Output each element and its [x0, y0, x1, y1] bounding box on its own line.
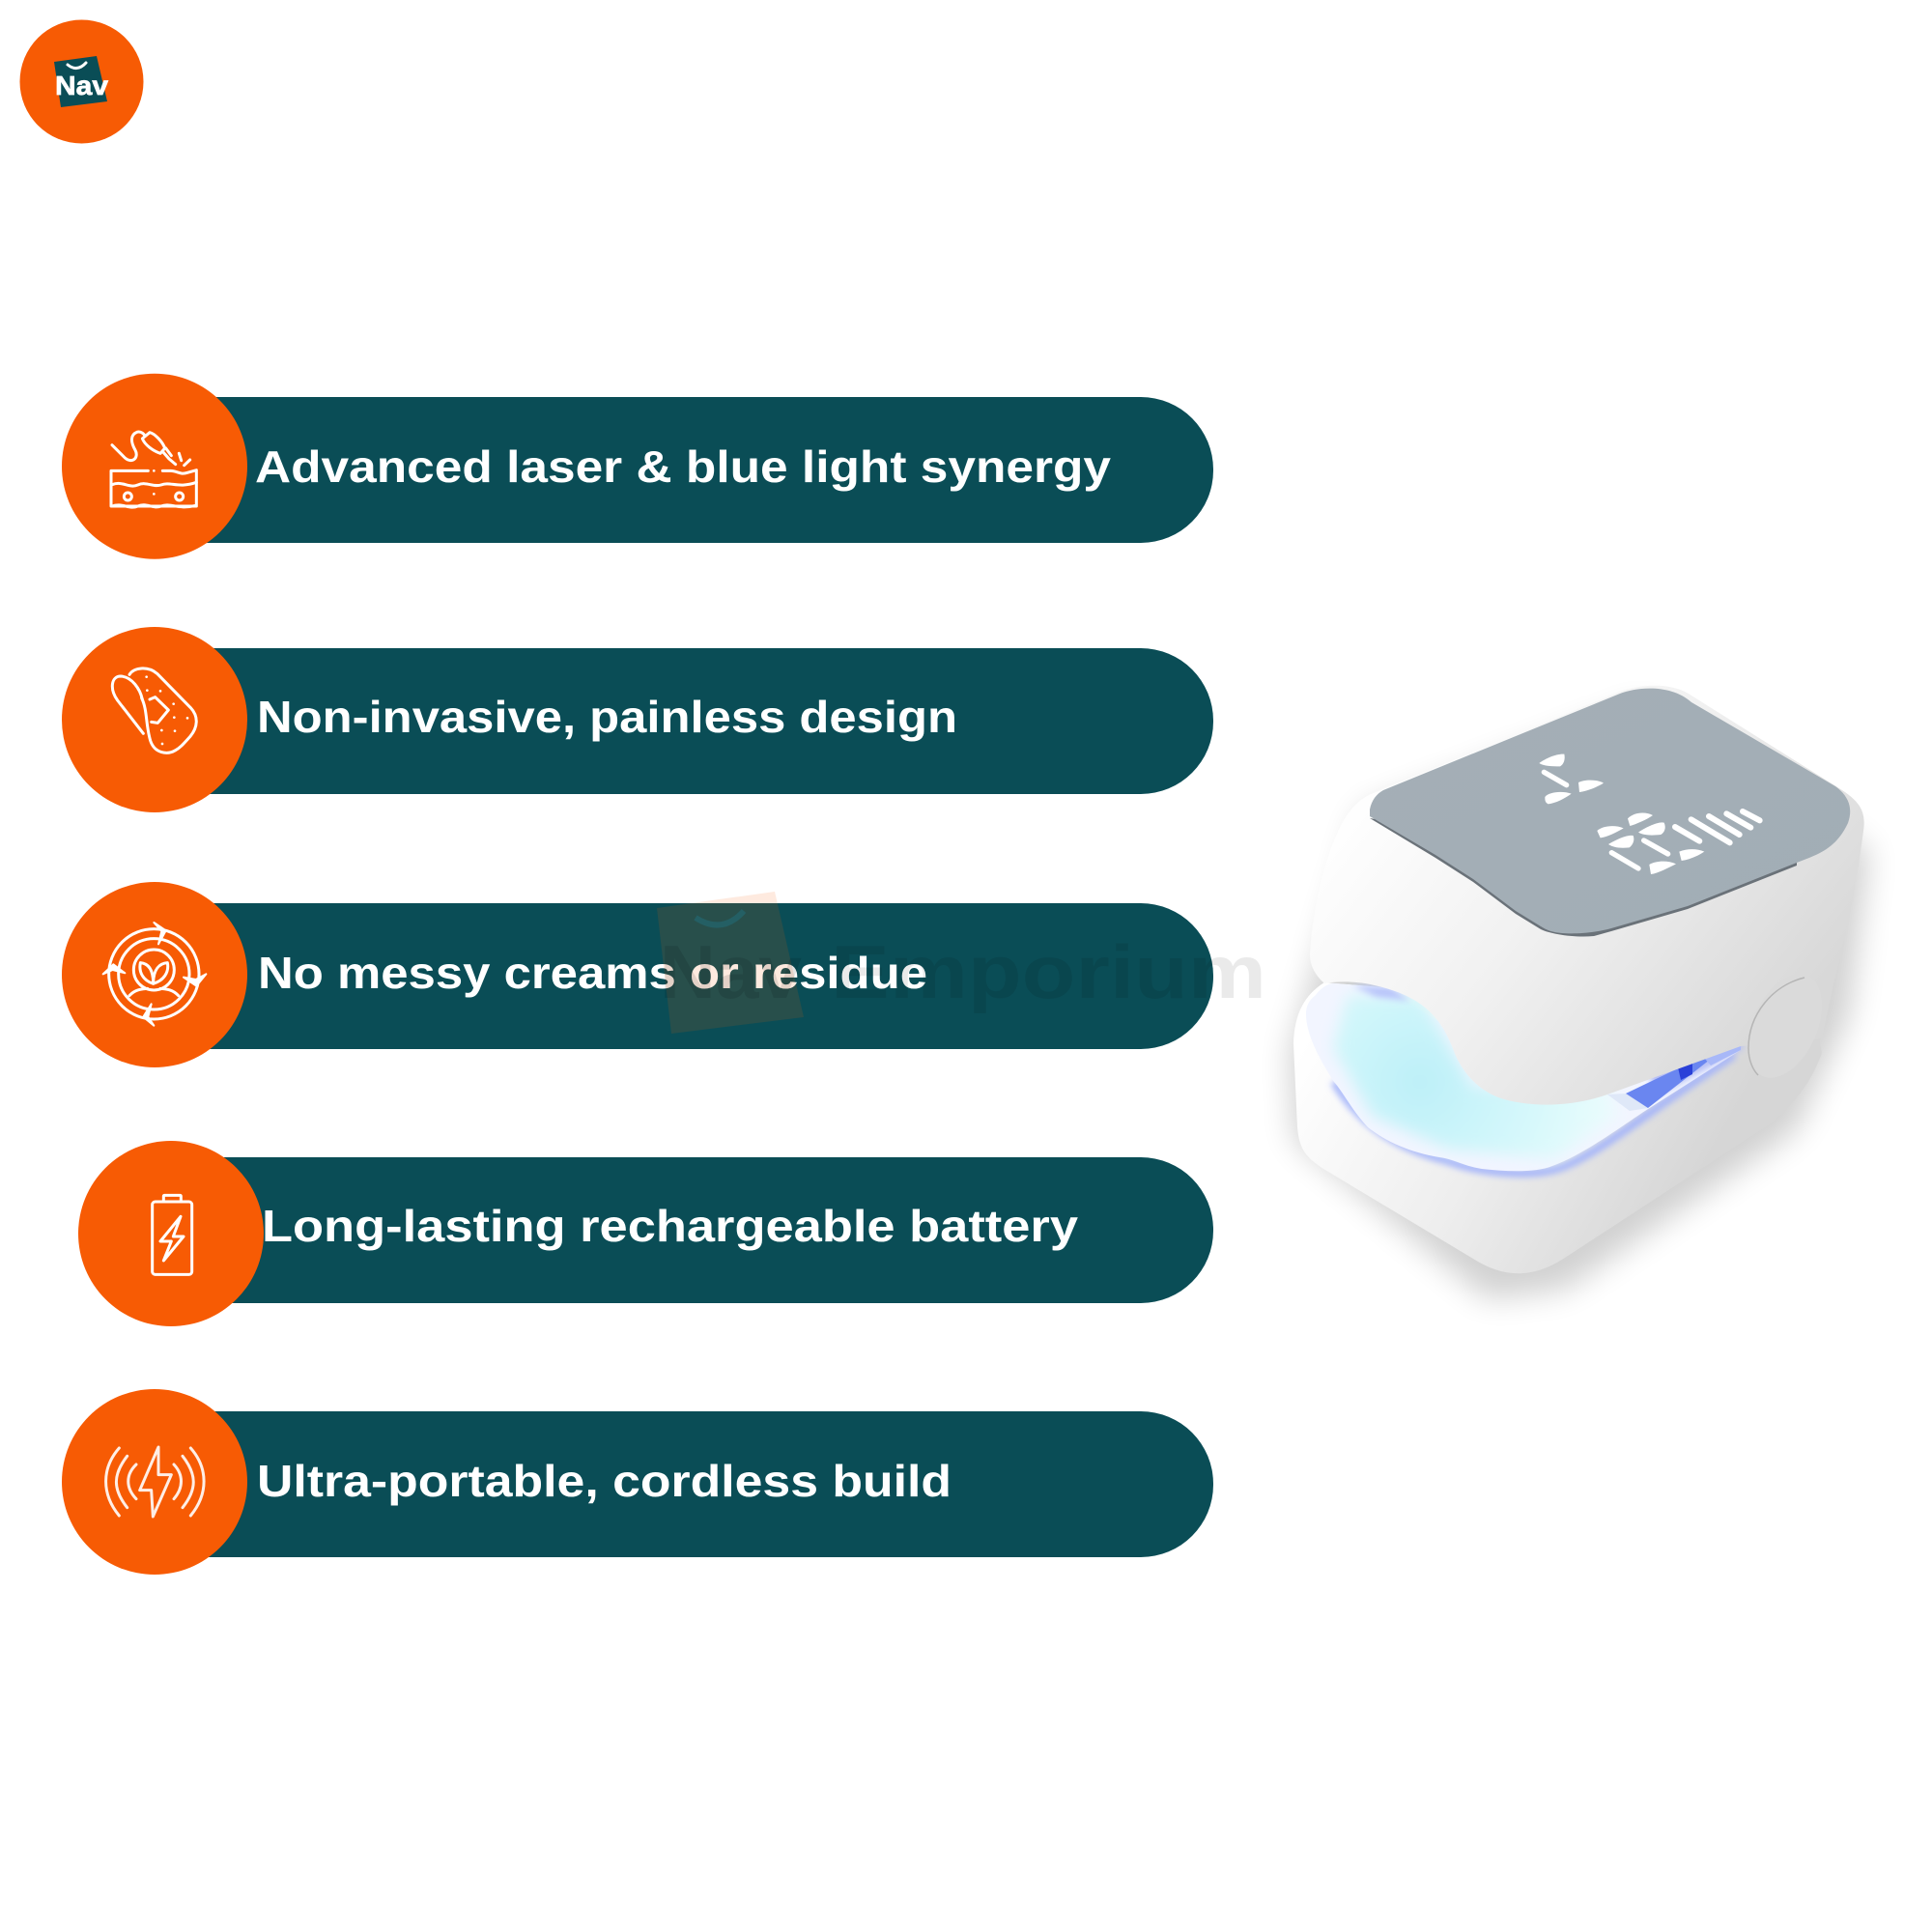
slot tip [1704, 1046, 1741, 1065]
watermark bag [657, 892, 804, 1034]
logo bag [54, 56, 107, 107]
slot blue light [1626, 1056, 1715, 1108]
product image: blue light device [1290, 686, 1869, 1299]
logo wordmark: Nav [55, 71, 108, 100]
lower body [1293, 982, 1822, 1273]
icon circle [62, 374, 247, 559]
label: Long-lasting rechargeable battery [262, 1201, 1078, 1251]
feature row 1 [62, 374, 1213, 559]
watermark wordmark: Nav [660, 929, 803, 1014]
logo badge [19, 19, 143, 143]
icon: wireless bolt [106, 1447, 204, 1517]
feature row 3 [62, 882, 1213, 1067]
pill [97, 903, 1213, 1049]
metal plate edge [1370, 818, 1797, 937]
icon: bandage [112, 668, 196, 753]
icon circle [62, 882, 247, 1067]
label: No messy creams or residue [258, 948, 927, 998]
slot streak [1678, 1061, 1692, 1080]
button edge [1748, 978, 1804, 1075]
pill [97, 648, 1213, 794]
channel blue halo [1334, 1055, 1734, 1173]
icon circle [78, 1141, 264, 1326]
feature row 5 [62, 1389, 1213, 1575]
metal plate [1370, 689, 1850, 933]
feature row 4 [78, 1141, 1213, 1326]
channel top tint [1352, 985, 1410, 1001]
side button [1734, 963, 1836, 1089]
icon: leaf cycle [103, 923, 206, 1026]
display digits [1539, 754, 1760, 874]
watermark emporium: Emporium [831, 929, 1266, 1014]
icon circle [62, 627, 247, 812]
icon: laser on skin [111, 432, 196, 507]
watermark: Nav Emporium [657, 892, 1266, 1034]
pill [97, 1411, 1213, 1557]
upper cap [1310, 686, 1864, 1105]
glowing channel [1306, 983, 1741, 1171]
icon: battery [153, 1195, 192, 1274]
pill [97, 397, 1213, 543]
pill [111, 1157, 1213, 1303]
channel cyan core [1333, 995, 1618, 1159]
slot halo [1647, 1034, 1744, 1096]
logo smile [68, 63, 86, 69]
label: Advanced laser & blue light synergy [255, 441, 1111, 492]
slot light band [1607, 1094, 1648, 1111]
watermark smile [696, 911, 744, 925]
label: Non-invasive, painless design [257, 692, 957, 742]
icon circle [62, 1389, 247, 1575]
drop shadow [1290, 705, 1869, 1299]
feature row 2 [62, 627, 1213, 812]
label: Ultra-portable, cordless build [257, 1456, 952, 1506]
